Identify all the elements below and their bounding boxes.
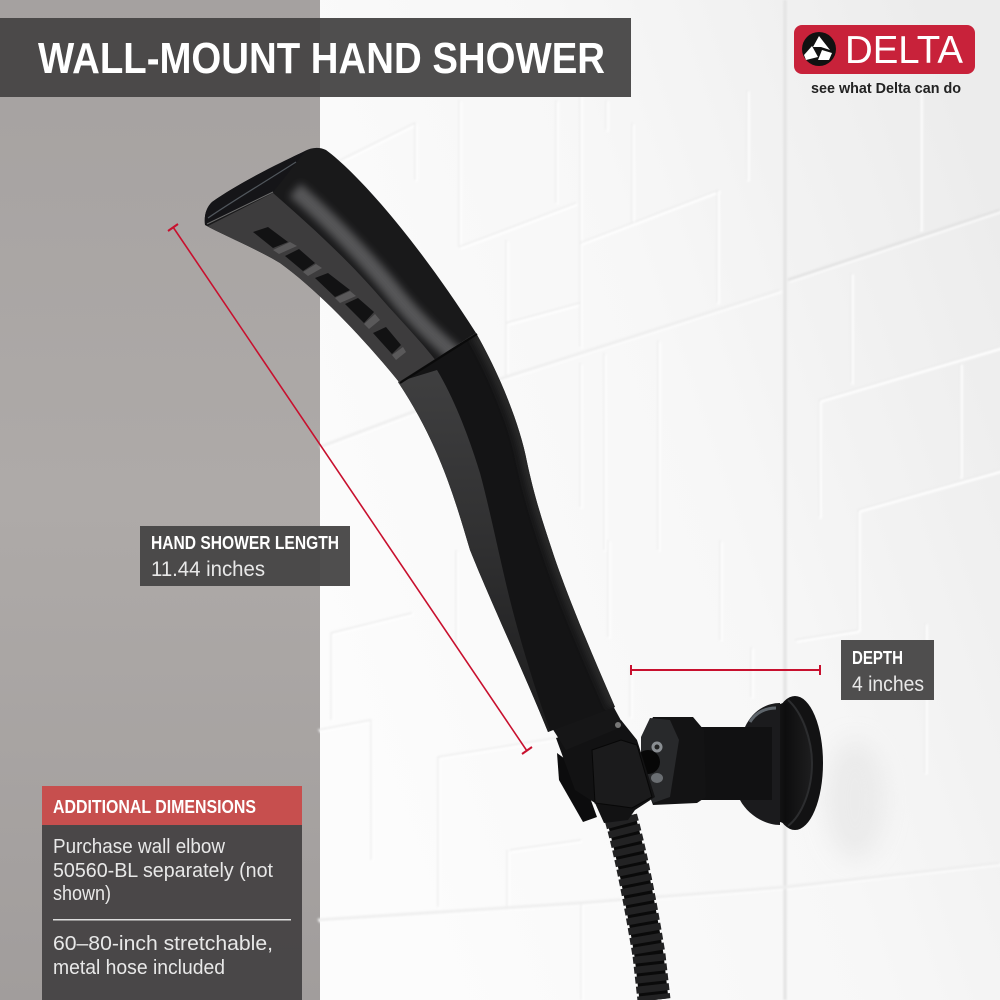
note: hose bbox=[53, 933, 273, 979]
head joint bbox=[400, 334, 477, 383]
panel heading bbox=[42, 786, 302, 825]
handle bbox=[398, 333, 615, 732]
title text: WALL-MOUNT HAND SHOWER bbox=[38, 34, 605, 83]
callout: hand shower length: 11.44 inches bbox=[151, 558, 265, 581]
background: grey wall bbox=[0, 0, 321, 1000]
note: hose: 60–80-inch stretchable, bbox=[53, 933, 273, 955]
logo wordmark: DELTA bbox=[845, 29, 963, 72]
callout: depth bbox=[841, 640, 934, 700]
spray nozzles bbox=[253, 227, 406, 360]
note: wall elbow: shown) bbox=[53, 883, 111, 905]
shower head bbox=[204, 148, 478, 384]
head side face bbox=[200, 193, 437, 386]
swivel holder bbox=[552, 704, 655, 823]
dimension line: depth bbox=[631, 665, 820, 675]
dimension line: hand shower length bbox=[168, 224, 532, 754]
icon: Delta triangle emblem bbox=[802, 32, 836, 66]
logo tagline: see what Delta can do bbox=[811, 80, 961, 97]
callout: hand shower length: HAND SHOWER LENGTH bbox=[151, 533, 339, 553]
panel: additional dimensions bbox=[42, 786, 302, 1000]
hose bbox=[621, 818, 654, 1000]
wall mount bracket bbox=[636, 696, 823, 830]
callout: hand shower length bbox=[140, 526, 350, 586]
note: hose: metal hose included bbox=[53, 957, 225, 979]
note: wall elbow bbox=[53, 836, 273, 905]
title banner bbox=[0, 18, 631, 97]
panel heading: ADDITIONAL DIMENSIONS bbox=[53, 797, 256, 817]
background: white tile wall bbox=[318, 0, 1000, 1000]
hand shower bbox=[200, 140, 823, 1000]
Delta logo bbox=[794, 25, 975, 97]
callout: depth: DEPTH bbox=[852, 648, 903, 668]
head front lip bbox=[203, 149, 308, 225]
callout: depth: 4 inches bbox=[852, 673, 924, 696]
note: wall elbow: Purchase wall elbow bbox=[53, 836, 226, 858]
note: wall elbow: 50560-BL separately (not bbox=[53, 860, 273, 882]
